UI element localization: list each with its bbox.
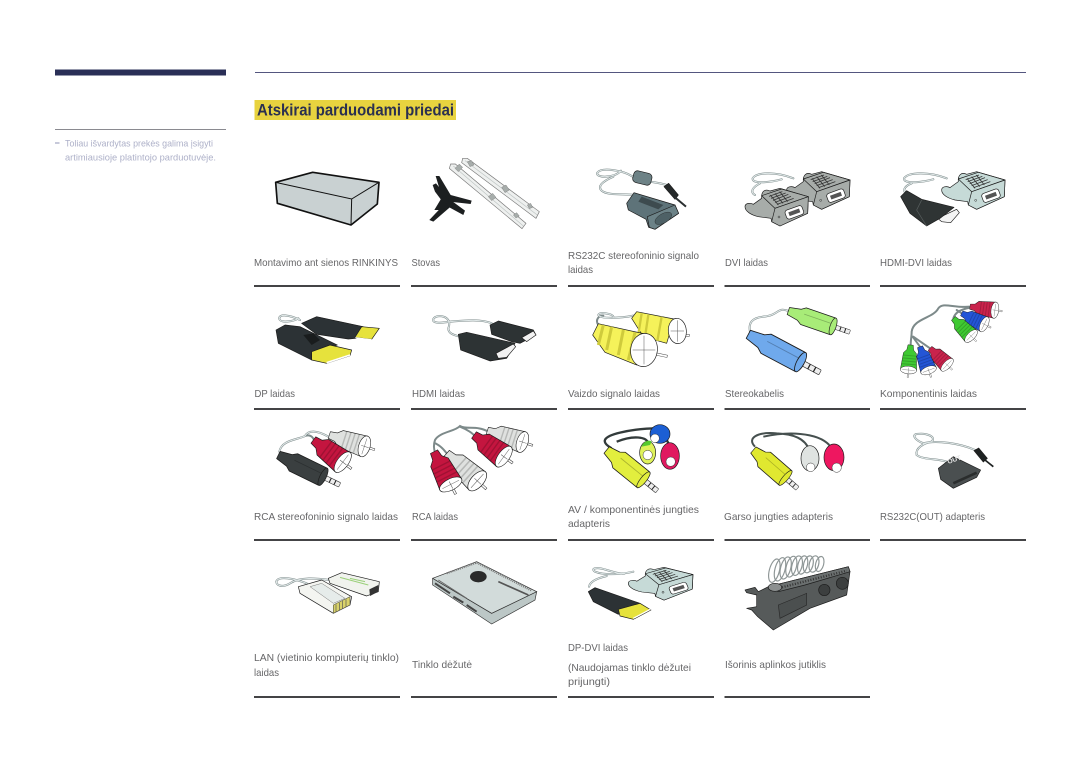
icon: AV adapter: [600, 425, 679, 499]
label: Išorinis aplinkos jutiklis: [725, 659, 826, 671]
icon: yellow RCA video cable: [593, 312, 689, 368]
label: adapteris: [568, 518, 610, 530]
icon: HDMI cable: [433, 316, 536, 361]
label: laidas: [254, 667, 279, 679]
label: RS232C(OUT) adapteris: [880, 511, 985, 523]
label: Stovas: [412, 257, 440, 269]
panel: DVI cable: [724, 172, 870, 287]
icon: DP-DVI cable: [588, 567, 693, 619]
panel: component cable: [880, 299, 1026, 410]
label: AV / komponentinės jungties: [568, 504, 699, 516]
label: Komponentinis laidas: [880, 388, 977, 400]
label: DP laidas: [254, 388, 295, 400]
panel: wall mount kit: [254, 172, 400, 287]
icon: component RCA cable: [900, 299, 1003, 380]
icon: external sensor: [745, 555, 850, 630]
panel: RS232C OUT adapter: [880, 434, 1026, 541]
icon: network box: [433, 562, 537, 624]
panel: network box: [411, 562, 557, 698]
panel: HDMI-DVI cable: [880, 172, 1026, 287]
label: LAN (vietinio kompiuterių tinklo): [254, 652, 399, 664]
icon: box: [276, 172, 379, 225]
icon: HDMI-DVI cable: [901, 172, 1005, 226]
icon: RS232C OUT adapter: [914, 434, 993, 488]
panel: RCA stereo cable: [254, 425, 400, 541]
panel: DP cable: [254, 315, 400, 410]
label: RCA laidas: [412, 511, 458, 523]
panel: DP-DVI cable: [568, 567, 714, 698]
label: [568, 504, 699, 530]
top rule: [255, 72, 1026, 73]
label: HDMI-DVI laidas: [880, 257, 952, 269]
label: [254, 652, 399, 679]
sidebar note: artimiausioje platintojo parduotuvėje.: [65, 152, 216, 162]
panel: AV component adapter: [568, 425, 714, 541]
panel: audio adapter: [724, 433, 870, 541]
label: Stereokabelis: [725, 388, 784, 400]
label: (Naudojamas tinklo dėžutei: [568, 662, 691, 674]
icon: RCA stereo cable: [274, 425, 378, 494]
label: [568, 642, 691, 688]
label: DP-DVI laidas: [568, 642, 628, 654]
label: RS232C stereofoninio signalo: [568, 250, 699, 262]
top left bar: [55, 70, 226, 76]
label: RCA stereofoninio signalo laidas: [254, 511, 398, 523]
icon: RCA cables: [423, 420, 536, 500]
icon: LAN plugs: [276, 573, 379, 613]
label: Garso jungties adapteris: [724, 511, 833, 523]
icon: RS232C cable: [597, 170, 686, 229]
icon: stand with rods: [429, 158, 539, 229]
label: Montavimo ant sienos RINKINYS: [254, 257, 398, 269]
panel: video cable: [568, 312, 714, 410]
sidebar note: Toliau išvardytas prekės galima įsigyti: [65, 138, 213, 148]
panel: RS232C stereo cable: [568, 170, 714, 287]
icon: DP cable: [276, 315, 379, 363]
panel: RCA cable: [411, 420, 557, 541]
label: DVI laidas: [725, 257, 768, 269]
panel: external sensor: [724, 555, 870, 698]
heading: Atskirai parduodami priedai: [257, 102, 454, 120]
icon: RS232C OUT adapter: OUT: [947, 454, 962, 466]
panel: LAN cable: [254, 573, 400, 698]
panel: HDMI cable: [411, 316, 557, 410]
label: Tinklo dėžutė: [412, 659, 472, 671]
label: Vaizdo signalo laidas: [568, 388, 660, 400]
icon: DVI cable: [745, 172, 850, 226]
icon: stereo jacks blue and green: [743, 303, 853, 382]
label: [568, 250, 699, 276]
icon: audio adapter: [747, 433, 844, 496]
panel: stereo cable: [724, 303, 870, 410]
panel: stand: [411, 158, 557, 287]
label: prijungti): [568, 676, 610, 688]
sidebar note: [55, 129, 226, 162]
label: laidas: [568, 264, 593, 276]
label: HDMI laidas: [412, 388, 465, 400]
